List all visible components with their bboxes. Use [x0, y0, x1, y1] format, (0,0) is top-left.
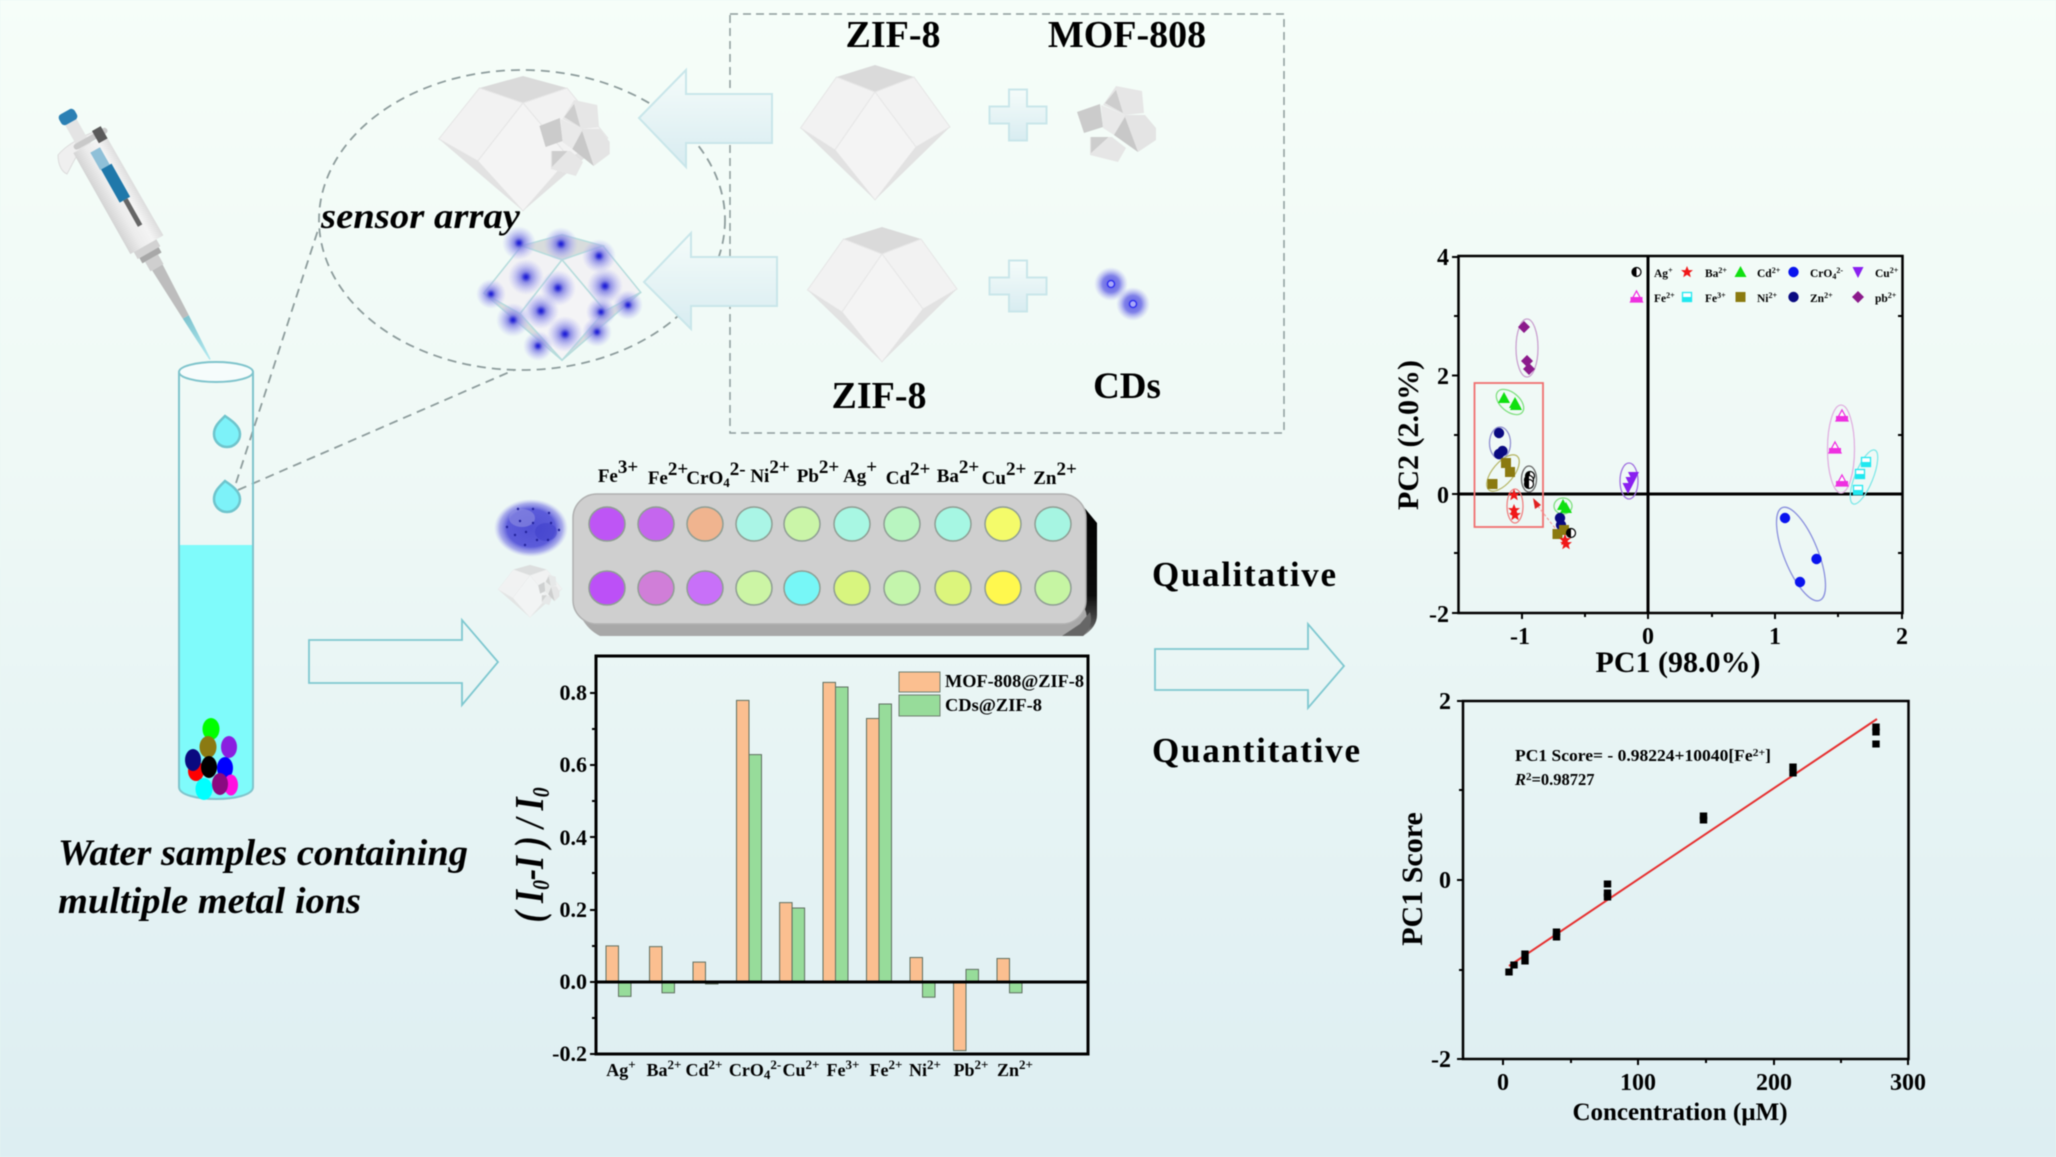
y tick labels: 0.4 [560, 825, 587, 850]
PCA legend: 2+ [1772, 266, 1781, 275]
y tick labels: 0.2 [560, 897, 587, 922]
regression tick labels [1431, 689, 1926, 1096]
x tick labels: 2+ [889, 1057, 902, 1072]
PCA tick labels: -2 [1429, 602, 1449, 628]
PCA y title: PC2 (2.0%) [1392, 360, 1425, 510]
PCA legend: Cu [1875, 268, 1890, 280]
label: CDs: CDs [1093, 366, 1161, 407]
caption: water samples: multiple metal ions [58, 881, 361, 922]
regression x title: Concentration (µM) [1572, 1099, 1788, 1126]
x tick labels: 3+ [846, 1057, 859, 1072]
PCA tick labels [1429, 245, 1908, 650]
y axis title: 0 [529, 880, 555, 890]
PCA frame and axes [1452, 256, 1902, 619]
y tick labels: 0.0 [560, 969, 587, 994]
arrow: tube to plate [309, 620, 498, 705]
legend [899, 671, 1084, 716]
regression tick labels: 200 [1756, 1070, 1792, 1096]
y axis title: ( I [506, 883, 552, 922]
label: sensor array: sensor array [320, 196, 521, 236]
label: MOF-808: MOF-808 [1048, 14, 1206, 56]
x tick labels: Zn [997, 1060, 1019, 1080]
PCA legend: 2+ [1666, 291, 1675, 300]
bar chart [506, 656, 1088, 1082]
label: ZIF-8 bottom: ZIF-8 [832, 375, 926, 417]
ion labels above plate: Ni [750, 466, 769, 487]
x tick labels [606, 1057, 1033, 1082]
PCA legend: CrO [1810, 268, 1832, 280]
ion labels above plate: 2+ [668, 459, 688, 480]
PCA x title: PC1 (98.0%) [1596, 646, 1760, 679]
PCA legend: Fe [1705, 293, 1717, 305]
x tick labels: 2+ [927, 1057, 941, 1072]
PCA legend: pb [1875, 293, 1888, 305]
regression tick labels: 0 [1497, 1070, 1509, 1096]
regression tick labels: 300 [1890, 1070, 1926, 1096]
wells row 2 [589, 571, 1071, 605]
ion labels above plate: 4 [723, 475, 730, 490]
icon: MOF-808@ZIF-8 composite [439, 76, 610, 211]
PCA legend: + [1668, 266, 1673, 275]
regression frame [1457, 701, 1908, 1065]
ion labels above plate: 2+ [769, 457, 790, 478]
x tick labels: 4 [764, 1067, 771, 1082]
x tick labels: 2+ [806, 1057, 819, 1072]
regression tick labels: 100 [1620, 1070, 1656, 1096]
PCA tick labels: 4 [1437, 245, 1449, 271]
x tick labels: 2+ [709, 1057, 722, 1072]
icon: test tube with water and ions [179, 362, 253, 800]
panel: materials dashed box [730, 14, 1284, 433]
x tick labels: Pb [954, 1060, 975, 1080]
x tick labels: 2+ [1019, 1057, 1033, 1072]
regression tick labels: -2 [1431, 1047, 1451, 1073]
y tick labels [552, 680, 587, 1066]
legend: CDs@ZIF-8 [945, 695, 1042, 715]
ion labels above plate: Cu [982, 468, 1006, 489]
x tick labels: Fe [827, 1060, 846, 1080]
ion labels above plate: 2- [730, 459, 746, 480]
icon: plus bottom [990, 260, 1046, 312]
arrow: upper left-pointing [639, 70, 772, 167]
icon: ZIF-8 crystal top [800, 65, 950, 200]
equation: PC1 Score= - 0.98224+10040[Fe [1515, 746, 1739, 765]
ion labels above plate: 2+ [1056, 459, 1077, 480]
PCA legend: 3+ [1717, 291, 1726, 300]
equation: R [1514, 770, 1526, 789]
arrow: lower left-pointing [644, 233, 777, 329]
equation: =0.98727 [1532, 770, 1595, 789]
icon: MOF-808 cluster [1077, 86, 1156, 162]
PCA tick labels: 2 [1437, 364, 1449, 390]
PCA legend: 2+ [1824, 291, 1833, 300]
ion labels above plate [598, 457, 1077, 490]
zoom pointer arrow [1533, 498, 1555, 528]
water drop lower [214, 481, 240, 512]
ion labels above plate: 2+ [910, 459, 930, 480]
PCA tick labels: 1 [1769, 624, 1781, 650]
cluster ellipses [1481, 319, 1883, 607]
tube opening [179, 362, 253, 382]
PCA legend: 2+ [1768, 291, 1778, 300]
PCA legend: Zn [1810, 293, 1824, 305]
ion labels above plate: Cd [886, 468, 910, 489]
wells row 1 [589, 507, 1071, 541]
label: ZIF-8 top: ZIF-8 [846, 14, 940, 56]
PCA legend: 2+ [1890, 266, 1899, 275]
ion labels above plate: 2+ [1006, 459, 1026, 480]
plate: sensor array [573, 494, 1097, 636]
x tick labels: 2+ [668, 1057, 681, 1072]
caption: water samples: Water samples containing [58, 833, 468, 874]
PCA legend: Fe [1654, 293, 1666, 305]
PCA tick labels: 0 [1437, 483, 1449, 509]
label: Qualitative: Qualitative [1152, 555, 1336, 594]
PCA legend: Cd [1757, 268, 1772, 280]
y tick labels: -0.2 [552, 1041, 587, 1066]
bars: MOF-808@ZIF-8 [606, 682, 1010, 1051]
tube liquid [179, 545, 253, 799]
icon: ZIF-8 crystal bottom [808, 227, 957, 362]
ion labels above plate: Fe [598, 466, 618, 487]
PCA legend: 4 [1832, 272, 1836, 281]
regression tick labels: 0 [1439, 868, 1451, 894]
icon: MOF sensor element [498, 565, 562, 618]
ion labels above plate: 3+ [618, 457, 638, 478]
x tick labels: Cu [783, 1060, 806, 1080]
tube glass [179, 372, 253, 799]
PCA scatter chart [1392, 245, 1908, 679]
bars: CDs@ZIF-8 [618, 687, 1022, 997]
data points [1488, 321, 1870, 587]
regression tick labels: 2 [1439, 689, 1451, 715]
PCA legend: Ag [1654, 268, 1668, 280]
highlight box [1474, 383, 1543, 527]
water drop upper [214, 416, 240, 447]
axes frame [596, 656, 1088, 1054]
PCA legend: Ba [1705, 268, 1718, 280]
x tick labels: CrO [729, 1060, 764, 1080]
ion labels above plate: 2+ [819, 457, 839, 478]
dashed leader lines from drop to ellipse [236, 230, 514, 490]
x tick labels: Cd [686, 1060, 709, 1080]
sensor array dashed ellipse [319, 70, 725, 370]
ion labels above plate: Ag [843, 466, 866, 487]
y tick labels: 0.6 [560, 752, 587, 777]
y tick labels: 0.8 [560, 680, 587, 705]
equation: ] [1765, 746, 1771, 765]
regression chart [1396, 689, 1926, 1126]
PCA legend [1630, 266, 1899, 305]
icon: CDs sensor element [494, 499, 568, 557]
PCA legend: 2+ [1888, 291, 1897, 300]
icon: pipette [54, 98, 230, 368]
label: Quantitative: Quantitative [1152, 731, 1360, 770]
PCA legend: 2- [1836, 266, 1843, 275]
icon: carbon dots [1094, 267, 1150, 321]
x tick labels: Ni [909, 1060, 927, 1080]
ion labels above plate: 2+ [959, 457, 979, 478]
fit line [1509, 719, 1877, 966]
icon: CDs@ZIF-8 composite [476, 226, 643, 361]
x tick labels: Ag [606, 1060, 628, 1080]
regression y title: PC1 Score [1396, 812, 1429, 946]
PCA tick labels: -1 [1510, 624, 1530, 650]
equation: 2 [1526, 771, 1532, 783]
x tick labels: 2- [770, 1057, 781, 1072]
y axis title: -I ) / I [506, 796, 552, 880]
ion labels above plate: Pb [797, 466, 819, 487]
ion labels above plate: Fe [648, 468, 668, 489]
PCA legend: 2+ [1718, 266, 1727, 275]
PCA tick labels: 2 [1896, 624, 1908, 650]
x tick labels: Ba [647, 1060, 668, 1080]
y axis title: 0 [529, 788, 555, 797]
legend: MOF-808@ZIF-8 [945, 671, 1084, 691]
PCA tick labels: 0 [1642, 624, 1654, 650]
ion labels above plate: Zn [1033, 468, 1056, 489]
x tick labels: Fe [870, 1060, 889, 1080]
ion labels above plate: + [866, 457, 877, 478]
ion labels above plate: CrO [686, 468, 723, 489]
x tick labels: + [628, 1057, 636, 1072]
arrow: results to analysis [1155, 624, 1344, 708]
metal ions [185, 718, 238, 800]
PCA legend: Ni [1757, 293, 1768, 305]
x tick labels: 2+ [975, 1057, 988, 1072]
data squares [1505, 724, 1880, 976]
equation: 2+ [1753, 747, 1765, 759]
equation [1514, 746, 1771, 789]
icon: plus top [990, 90, 1046, 140]
ion labels above plate: Ba [937, 466, 959, 487]
